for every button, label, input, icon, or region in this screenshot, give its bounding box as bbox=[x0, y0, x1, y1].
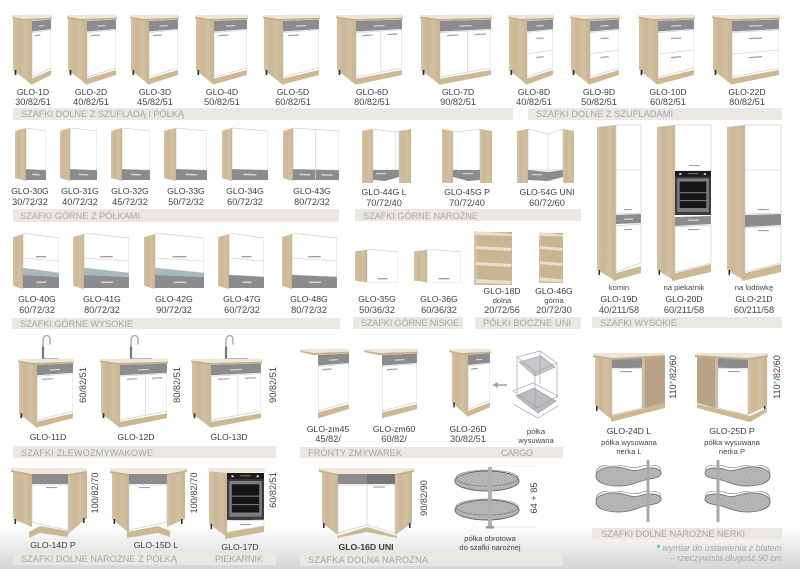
cabinet GLO-42G: 90/72/32 bbox=[156, 305, 192, 315]
heading bar: fronty zmywarek / cargo: FRONTY ZMYWAREK bbox=[308, 448, 403, 458]
cabinet GLO-2D: GLO-2D bbox=[75, 87, 107, 97]
heading bar: szafki górne z półkami bbox=[13, 209, 339, 222]
cabinet GLO-17D bbox=[208, 468, 278, 552]
cabinet GLO-54G UNI bbox=[517, 129, 575, 208]
shelf unit GLO-18D: dolna bbox=[493, 296, 512, 305]
cabinet GLO-zm60 bbox=[364, 349, 418, 444]
cabinet GLO-4D: 50/82/51 bbox=[204, 97, 240, 107]
heading bar: szafki dolne narożne z półką / piekarnik bbox=[13, 553, 276, 565]
cabinet GLO-42G bbox=[144, 233, 204, 315]
heading bar: szafka dolna narożna: SZAFKA DOLNA NAROŻNA bbox=[308, 555, 429, 565]
cabinet GLO-7D: 90/82/51 bbox=[440, 97, 476, 107]
cabinet GLO-19D: 40/211/58 bbox=[599, 305, 639, 315]
cabinet GLO-25D P bbox=[695, 353, 782, 456]
cabinet GLO-24D L bbox=[593, 353, 678, 456]
cabinet GLO-5D: 60/82/51 bbox=[275, 97, 311, 107]
cabinet GLO-25D P: nerka P bbox=[719, 447, 745, 456]
cabinet GLO-35G: GLO-35G bbox=[358, 294, 396, 304]
cabinet GLO-35G bbox=[355, 249, 398, 315]
cabinet GLO-36G bbox=[414, 249, 461, 315]
cabinet GLO-9D: 50/82/51 bbox=[581, 97, 617, 107]
footnote: * wymiar do ustawienia z blatem bbox=[656, 543, 782, 553]
cabinet GLO-31G bbox=[60, 128, 99, 207]
cabinet GLO-48G: 80/72/32 bbox=[291, 305, 327, 315]
cabinet GLO-32G bbox=[111, 128, 150, 207]
panel: fronty zmywarek bbox=[300, 349, 563, 458]
heading bar: szafki dolne z szufladami: SZAFKI DOLNE Z SZUFLADAMI bbox=[536, 109, 673, 119]
panel: szafki wysokie bbox=[592, 125, 782, 328]
cabinet GLO-44G L: 70/72/40 bbox=[366, 198, 402, 208]
cabinet GLO-19D bbox=[597, 125, 641, 315]
cabinet GLO-33G bbox=[164, 128, 207, 207]
cabinet GLO-33G: GLO-33G bbox=[167, 186, 205, 196]
cabinet GLO-4D: GLO-4D bbox=[206, 87, 238, 97]
cabinet GLO-zm45 bbox=[300, 349, 349, 444]
cabinet GLO-45G P: GLO-45G P bbox=[444, 187, 490, 197]
cabinet GLO-6D: 80/82/51 bbox=[354, 97, 390, 107]
cabinet GLO-zm60: 60/82/ bbox=[381, 434, 407, 444]
cabinet GLO-33G: 50/72/32 bbox=[168, 197, 204, 207]
panel: szafki górne niskie bbox=[353, 249, 463, 329]
heading bar: szafki wysokie: SZAFKI WYSOKIE bbox=[600, 318, 677, 328]
cabinet GLO-22D: GLO-22D bbox=[728, 87, 766, 97]
cabinet GLO-20D: GLO-20D bbox=[665, 294, 703, 304]
cabinet GLO-8D: GLO-8D bbox=[518, 87, 550, 97]
cabinet GLO-26D: 30/82/51 bbox=[450, 434, 486, 444]
cabinet GLO-10D: 60/82/51 bbox=[650, 97, 686, 107]
cabinet GLO-5D: GLO-5D bbox=[277, 87, 309, 97]
caption: półka wysuwana: półka bbox=[527, 427, 546, 436]
cabinet GLO-11D: 60/82/51 bbox=[78, 367, 88, 403]
cabinet GLO-24D L: półka wysuwana bbox=[601, 438, 658, 447]
cabinet GLO-43G: GLO-43G bbox=[293, 186, 331, 196]
cabinet GLO-36G: 60/36/32 bbox=[421, 305, 457, 315]
cabinet GLO-14D P bbox=[11, 468, 100, 550]
cabinet GLO-21D bbox=[727, 125, 781, 315]
cabinet GLO-41G bbox=[73, 233, 129, 315]
illustration: rotating corner shelf bbox=[455, 466, 536, 528]
footnote bbox=[656, 543, 782, 563]
panel: szafki górne wysokie bbox=[12, 233, 340, 329]
cabinet GLO-32G: GLO-32G bbox=[111, 186, 149, 196]
cabinet GLO-43G: 80/72/32 bbox=[294, 197, 330, 207]
cabinet GLO-4D bbox=[195, 15, 248, 107]
cabinet GLO-7D: GLO-7D bbox=[442, 87, 474, 97]
shelf unit GLO-18D: GLO-18D bbox=[483, 286, 521, 296]
arrow: cargo shelf into cabinet bbox=[492, 382, 507, 388]
cabinet GLO-48G: GLO-48G bbox=[290, 294, 328, 304]
panel: szafki zlewozmywakowe bbox=[13, 336, 278, 458]
cabinet GLO-17D: 60/82/51 bbox=[268, 472, 278, 508]
cabinet GLO-9D: GLO-9D bbox=[583, 87, 615, 97]
caption: półka obrotowa: półka obrotowa bbox=[464, 534, 517, 543]
cabinet GLO-12D: 80/82/51 bbox=[172, 367, 182, 403]
heading bar: szafki zlewozmywakowe: SZAFKI ZLEWOZMYWAKOWE bbox=[21, 448, 153, 458]
cabinet GLO-1D bbox=[12, 15, 52, 107]
cabinet GLO-10D bbox=[638, 15, 695, 107]
cabinet GLO-36G: GLO-36G bbox=[420, 294, 458, 304]
illustration: cargo pull-out shelf bbox=[513, 351, 558, 418]
cabinet GLO-45G P: 70/72/40 bbox=[449, 198, 485, 208]
cabinet GLO-24D L: GLO-24D L bbox=[607, 426, 651, 436]
heading bar: szafki dolne z szufladą i półką: SZAFKI DOLNE Z SZUFLADĄ I PÓŁKĄ bbox=[21, 109, 185, 119]
heading bar: szafki górne niskie: SZAFKI GÓRNE NISKIE bbox=[361, 318, 459, 328]
cabinet GLO-19D: komin bbox=[609, 283, 629, 292]
heading bar: szafki dolne narożne nerki bbox=[592, 528, 782, 539]
cabinet GLO-6D: GLO-6D bbox=[356, 87, 388, 97]
cabinet GLO-30G: 30/72/32 bbox=[12, 197, 48, 207]
panel: szafki dolne narożne nerki bbox=[592, 353, 782, 539]
heading bar: szafki dolne z szufladami bbox=[528, 108, 782, 120]
shelf unit GLO-46G: GLO-46G bbox=[535, 286, 573, 296]
cabinet GLO-5D bbox=[263, 15, 320, 107]
cabinet GLO-12D bbox=[100, 336, 182, 442]
cabinet GLO-25D P: GLO-25D P bbox=[709, 426, 755, 436]
cabinet GLO-54G UNI: 60/72/60 bbox=[529, 198, 565, 208]
cabinet GLO-12D: GLO-12D bbox=[117, 432, 155, 442]
heading bar: szafka dolna narożna bbox=[300, 553, 563, 566]
heading bar: fronty zmywarek / cargo: CARGO bbox=[501, 448, 533, 458]
cabinet GLO-35G: 50/36/32 bbox=[359, 305, 395, 315]
cabinet GLO-6D bbox=[336, 15, 403, 107]
cabinet GLO-34G: 60/72/32 bbox=[227, 197, 263, 207]
cabinet GLO-2D: 40/82/51 bbox=[73, 97, 109, 107]
cabinet GLO-41G: 80/72/32 bbox=[84, 305, 120, 315]
cabinet GLO-24D L: nerka L bbox=[616, 447, 642, 456]
caption: półka obrotowa: do szafki narożnej bbox=[459, 543, 521, 552]
cabinet GLO-44G L bbox=[362, 129, 411, 208]
heading bar: szafki górne wysokie: SZAFKI GÓRNE WYSOKIE bbox=[20, 319, 133, 329]
cabinet GLO-zm45: GLO-zm45 bbox=[307, 424, 349, 434]
cabinet GLO-8D: 40/82/51 bbox=[516, 97, 552, 107]
cabinet GLO-3D: GLO-3D bbox=[139, 87, 171, 97]
cabinet GLO-13D: GLO-13D bbox=[210, 432, 248, 442]
caption: półka wysuwana bbox=[517, 427, 554, 445]
cabinet GLO-15D L: GLO-15D L bbox=[134, 540, 178, 550]
heading bar: szafki dolne narożne z półką / piekarnik: PIEKARNIK bbox=[215, 554, 264, 564]
panel: szafki górne z półkami bbox=[11, 128, 339, 222]
cabinet GLO-40G: GLO-40G bbox=[18, 294, 56, 304]
cabinet GLO-25D P: półka wysuwana bbox=[704, 438, 761, 447]
heading bar: szafki górne z półkami: SZAFKI GÓRNE Z PÓŁKAMI bbox=[20, 211, 140, 221]
cabinet GLO-24D L: 110*/82/60 bbox=[668, 355, 678, 399]
shelf unit GLO-18D bbox=[474, 231, 521, 315]
cabinet GLO-21D: na lodówkę bbox=[735, 283, 773, 292]
cabinet GLO-8D bbox=[508, 15, 554, 107]
cabinet GLO-42G: GLO-42G bbox=[155, 294, 193, 304]
cabinet GLO-31G: 40/72/32 bbox=[62, 197, 98, 207]
cabinet GLO-30G bbox=[11, 128, 49, 207]
cabinet GLO-15D L: 100/82/70 bbox=[189, 473, 199, 513]
cabinet GLO-16D UNI bbox=[319, 468, 429, 552]
cabinet GLO-40G bbox=[13, 233, 59, 315]
cabinet GLO-zm45: 45/82/ bbox=[315, 434, 341, 444]
panel: szafki górne narożne bbox=[355, 129, 581, 221]
cabinet GLO-11D bbox=[18, 336, 88, 442]
cabinet GLO-16D UNI: 90/82/90 bbox=[419, 480, 429, 516]
cabinet GLO-2D bbox=[67, 15, 117, 107]
panel: szafki dolne z szufladami bbox=[508, 15, 782, 120]
illustration: kidney shelf right bbox=[705, 460, 770, 522]
cabinet GLO-25D P: 110*/82/60 bbox=[772, 355, 782, 399]
shelf unit GLO-46G: górna bbox=[544, 296, 564, 305]
cabinet GLO-17D: GLO-17D bbox=[221, 542, 259, 552]
cabinet GLO-32G: 45/72/32 bbox=[112, 197, 148, 207]
cabinet GLO-21D: 60/211/58 bbox=[734, 305, 774, 315]
heading bar: szafki górne narożne: SZAFKI GÓRNE NAROŻNE bbox=[363, 211, 478, 221]
footnote: – rzeczywista długość 90 cm bbox=[669, 553, 782, 563]
cabinet GLO-40G: 60/72/32 bbox=[19, 305, 55, 315]
heading bar: szafki dolne narożne nerki: SZAFKI DOLNE NAROŻNE NERKI bbox=[601, 529, 745, 539]
cabinet GLO-13D: 90/82/51 bbox=[268, 367, 278, 403]
panel: półki boczne uni bbox=[474, 231, 581, 329]
icon: oven bbox=[227, 473, 264, 520]
cabinet GLO-41G: GLO-41G bbox=[83, 294, 121, 304]
illustration: kidney shelf left bbox=[596, 460, 661, 522]
cabinet GLO-9D bbox=[570, 15, 620, 107]
cabinet GLO-20D: 60/211/58 bbox=[664, 305, 704, 315]
cabinet GLO-22D bbox=[712, 15, 780, 107]
cabinet GLO-21D: GLO-21D bbox=[735, 294, 773, 304]
heading bar: szafki zlewozmywakowe bbox=[13, 446, 276, 458]
caption: półka obrotowa bbox=[459, 534, 521, 552]
cabinet GLO-54G UNI: GLO-54G UNI bbox=[519, 187, 575, 197]
cabinet GLO-1D: 30/82/51 bbox=[15, 97, 51, 107]
cabinet GLO-20D bbox=[657, 125, 711, 315]
heading bar: szafki dolne z szufladą i półką bbox=[13, 108, 513, 120]
cabinet GLO-26D bbox=[449, 349, 491, 444]
shelf unit GLO-18D: 20/72/56 bbox=[484, 305, 520, 315]
heading bar: szafki górne wysokie bbox=[12, 318, 340, 329]
caption: półka wysuwana: wysuwana bbox=[517, 436, 554, 445]
cabinet GLO-47G: 60/72/32 bbox=[224, 305, 260, 315]
shelf unit GLO-46G: 20/72/30 bbox=[536, 305, 572, 315]
cabinet GLO-10D: GLO-10D bbox=[649, 87, 687, 97]
cabinet GLO-26D: GLO-26D bbox=[449, 424, 487, 434]
heading bar: szafki wysokie bbox=[592, 317, 782, 328]
dimension: 64 + 85: 64 + 85 bbox=[529, 483, 539, 513]
cabinet GLO-19D: GLO-19D bbox=[600, 294, 638, 304]
cabinet GLO-14D P: GLO-14D P bbox=[30, 540, 76, 550]
cabinet GLO-7D bbox=[420, 15, 492, 107]
cabinet GLO-13D bbox=[191, 336, 278, 442]
cabinet GLO-34G bbox=[222, 128, 268, 207]
cabinet GLO-11D: GLO-11D bbox=[30, 432, 66, 442]
heading bar: szafki dolne narożne z półką / piekarnik: SZAFKI DOLNE NAROŻNE Z PÓŁKĄ bbox=[21, 554, 178, 564]
cabinet GLO-3D bbox=[130, 15, 179, 107]
shelf unit GLO-46G bbox=[535, 232, 573, 315]
cabinet GLO-15D L bbox=[110, 468, 199, 550]
cabinet GLO-34G: GLO-34G bbox=[226, 186, 264, 196]
heading bar: półki boczne uni: PÓŁKI BOCZNE UNI bbox=[483, 318, 571, 328]
cabinet GLO-14D P: 100/82/70 bbox=[90, 473, 100, 513]
cabinet GLO-43G bbox=[283, 128, 339, 207]
panel: szafka dolna narożna bbox=[300, 468, 563, 566]
cabinet GLO-47G: GLO-47G bbox=[223, 294, 261, 304]
panel: szafki dolne z szufladą i półką bbox=[12, 15, 513, 120]
cabinet GLO-22D: 80/82/51 bbox=[729, 97, 765, 107]
panel: szafki dolne narożne z półką i piekarnik bbox=[11, 468, 278, 565]
cabinet GLO-47G bbox=[218, 233, 264, 315]
icon: oven bbox=[675, 171, 711, 215]
cabinet GLO-20D: na piekarnik bbox=[664, 283, 705, 292]
cabinet GLO-3D: 45/82/51 bbox=[137, 97, 173, 107]
cabinet GLO-30G: GLO-30G bbox=[11, 186, 49, 196]
cabinet GLO-31G: GLO-31G bbox=[61, 186, 99, 196]
cabinet GLO-1D: GLO-1D bbox=[17, 87, 49, 97]
cabinet GLO-45G P bbox=[442, 129, 492, 208]
cabinet GLO-44G L: GLO-44G L bbox=[362, 187, 407, 197]
heading bar: fronty zmywarek / cargo bbox=[300, 447, 563, 458]
cabinet GLO-16D UNI: GLO-16D UNI bbox=[338, 542, 394, 552]
cabinet GLO-48G bbox=[282, 233, 337, 315]
heading bar: szafki górne narożne bbox=[355, 209, 581, 221]
cabinet GLO-zm60: GLO-zm60 bbox=[373, 424, 415, 434]
